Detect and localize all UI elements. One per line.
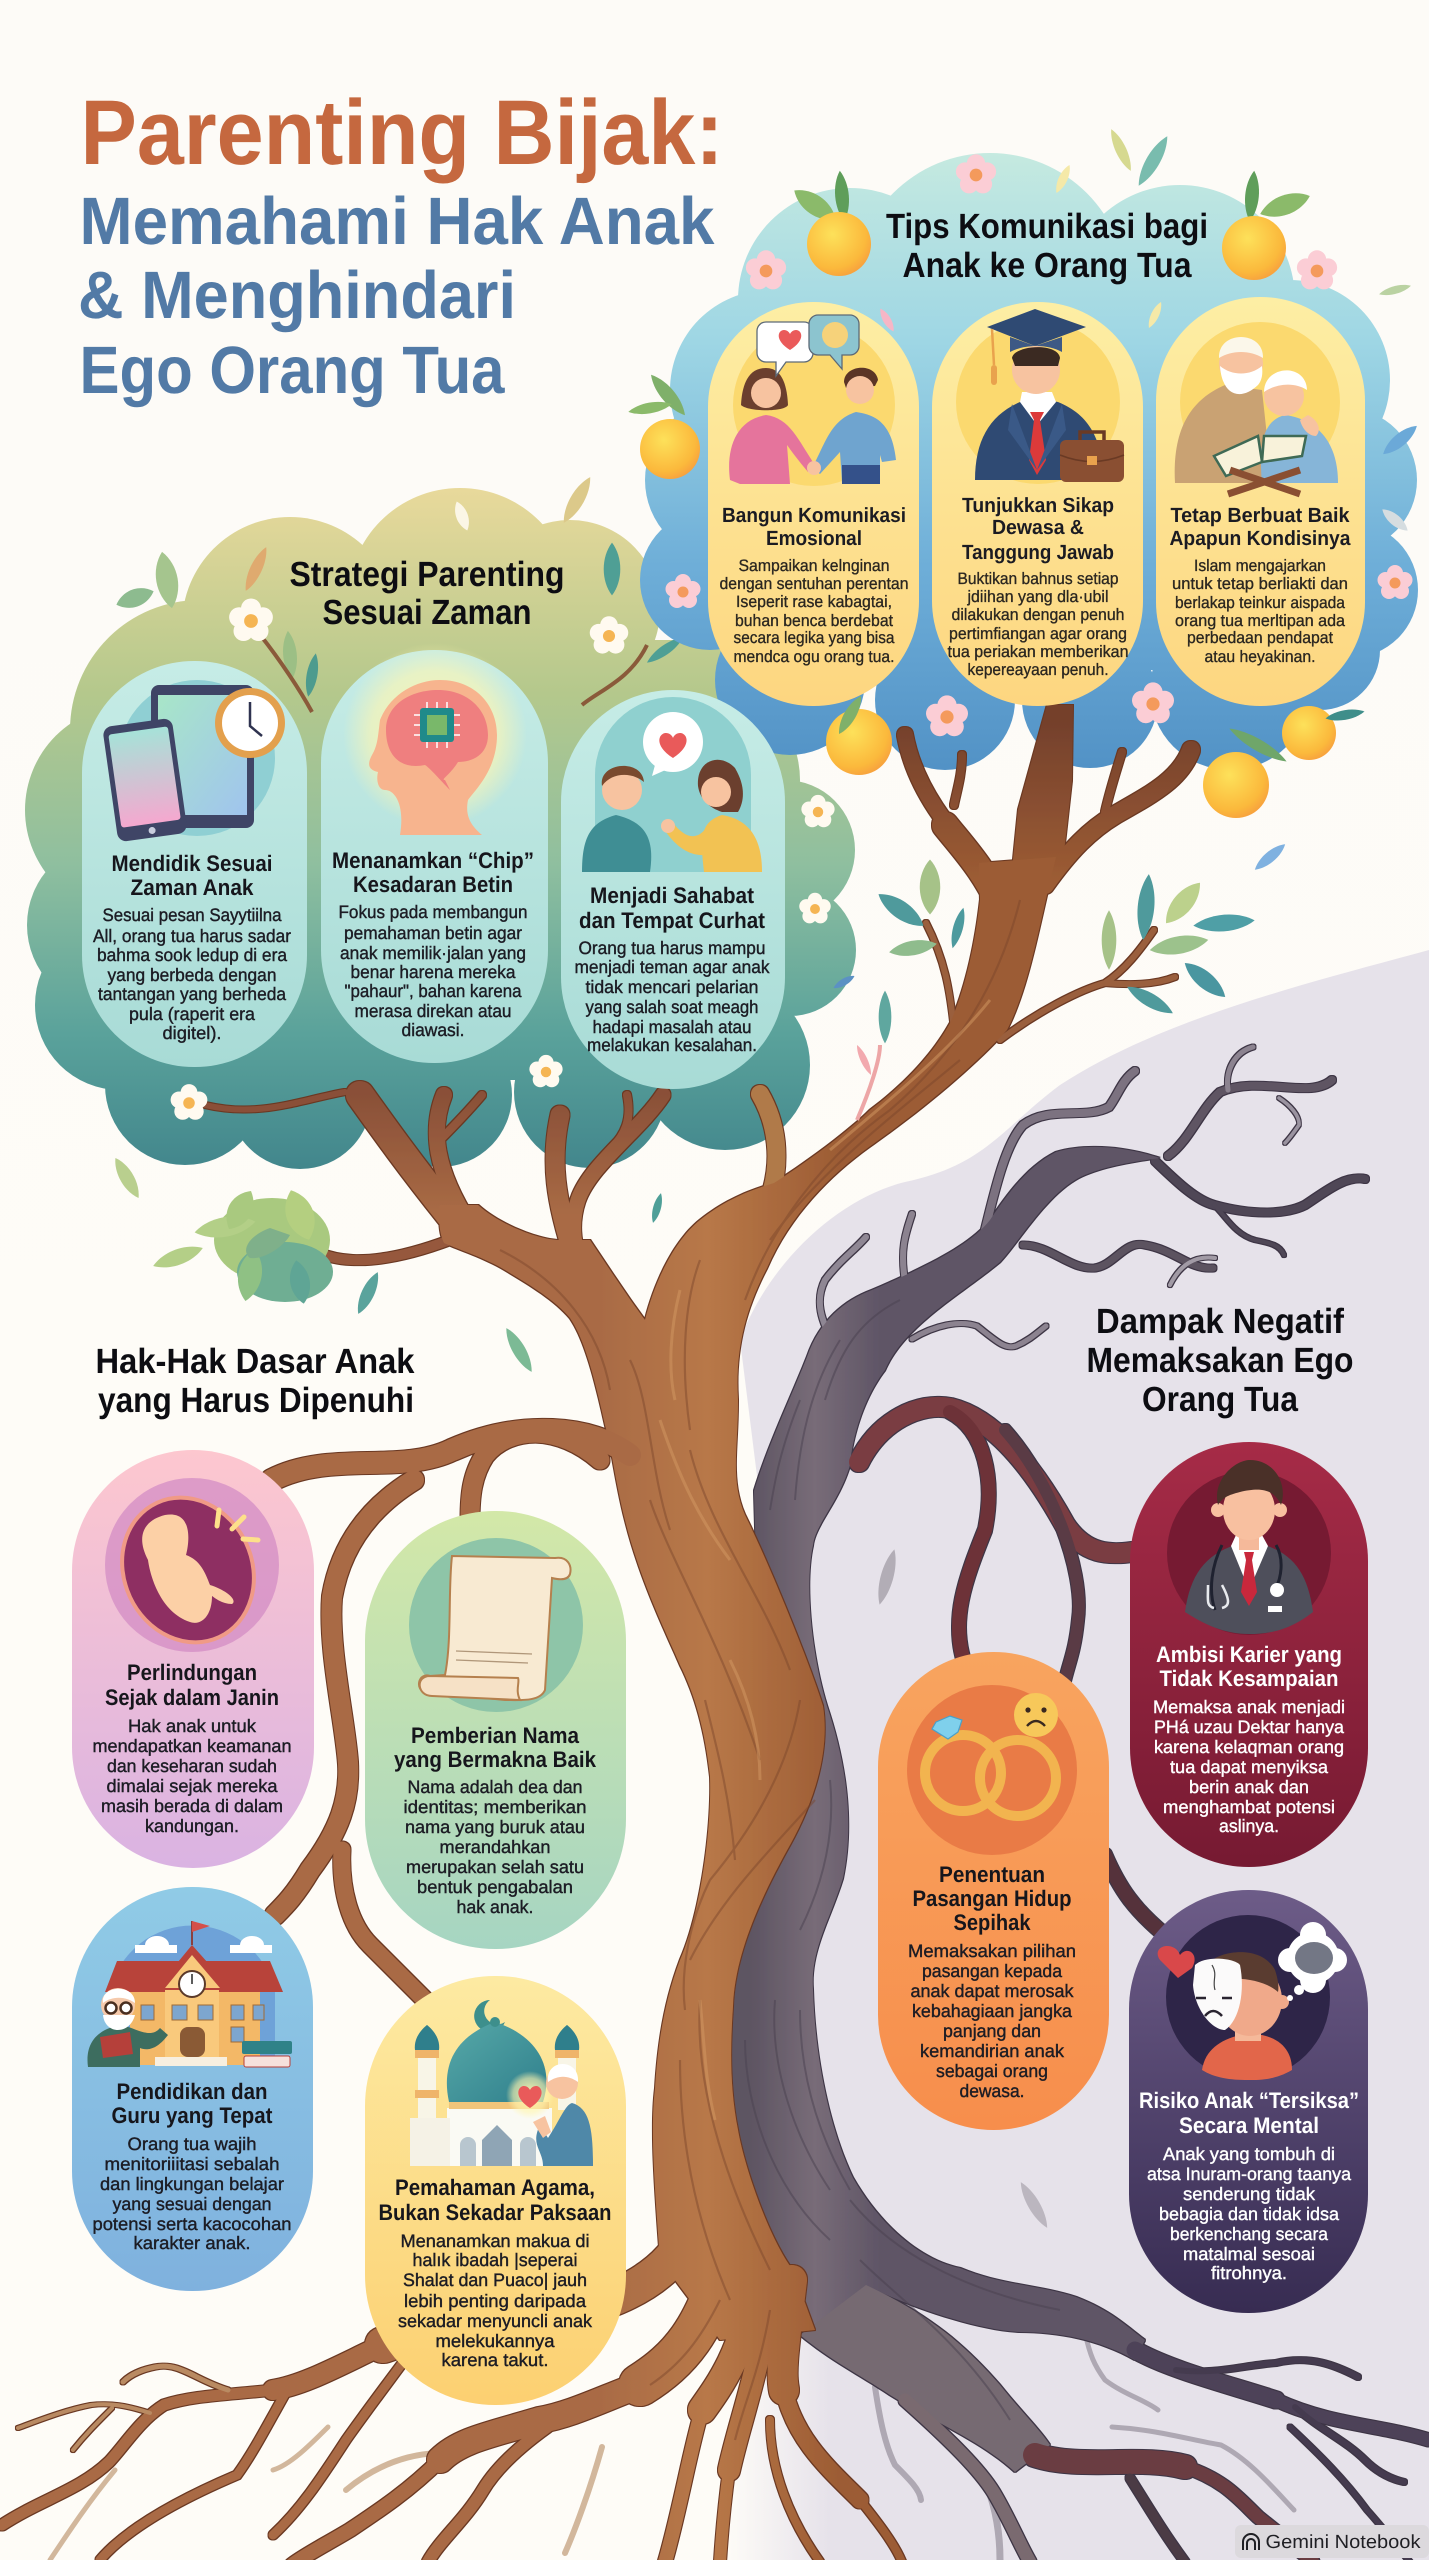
card body: bentuk pengabalan [417,1877,573,1897]
card title [722,504,906,550]
card body [93,905,291,1043]
foliage leaf sprigs left crown [113,474,686,712]
card title: Tanggung Jawab [962,541,1114,564]
card body: merupakan selah satu [406,1857,584,1877]
watermark badge [1235,2525,1429,2558]
card body: nama yang buruk atau [405,1817,585,1837]
crown: strategi parenting (left foliage) [25,474,856,1169]
card body: aslinya. [1219,1816,1279,1836]
icon: paper scroll [409,1538,583,1712]
card body [720,557,908,666]
card body [1153,1697,1345,1836]
card title: dan Tempat Curhat [579,908,765,933]
card body [338,902,528,1040]
card: penentuan pasangan [878,1652,1109,2130]
card body [404,1777,586,1917]
card body: PHá uzau Dektar hanya [1154,1717,1345,1737]
card body: Sesuai pesan Sayytiilna [102,905,282,925]
card body [908,1941,1076,2101]
card body: panjang dan [943,2021,1041,2041]
card title: Sepihak [954,1910,1031,1935]
card body: Iseperit rase kabagtai, [736,593,892,611]
card body: fitrohnya. [1211,2263,1287,2283]
crown: tips komunikasi (top foliage) [640,153,1418,770]
card body: hak anak. [456,1897,534,1917]
card: pemahaman agama [365,1976,626,2405]
grey tree side: trunk, branches, maroon limbs and roots [700,1047,1429,2560]
card body: melakukan kesalahan. [587,1035,757,1055]
heading: dampak negatif [1086,1302,1354,1419]
card body: tua dapat menyiksa [1170,1757,1329,1777]
card body: yang sesuai dengan [112,2194,272,2214]
card body: dan keseharan sudah [107,1756,277,1776]
card title: Tetap Berbuat Baik [1170,504,1350,527]
icon: parent and child talking [582,697,762,872]
card title: Penentuan [939,1862,1045,1887]
maroon branch [859,1407,1165,1935]
card body: buhan benca berdebat [735,612,893,630]
branches into left crown [205,1092,776,1300]
card body: berlakap teinkur aispada [1175,594,1346,612]
card body: senderung tidak [1183,2184,1316,2204]
card body: lebih penting daripada [404,2291,587,2311]
card body: menjadi teman agar anak [574,957,770,977]
roots brown [2,2230,902,2560]
fruit: orange lower left [826,693,892,775]
heading: strategi parenting [290,555,564,632]
card title: Pemahaman Agama, [395,2175,595,2200]
card body: karena takut. [442,2350,548,2370]
card body: sebagai orang [936,2061,1048,2081]
card title: Bukan Sekadar Paksaan [378,2200,612,2225]
card body: Orang tua harus mampu [578,938,766,958]
card body: pasangan kepada [922,1961,1063,1981]
card body: perbedaan pendapat [1187,629,1333,647]
card body: dimalai sejak mereka [106,1776,278,1796]
heading: dampak negatif: Dampak Negatif [1096,1302,1344,1341]
lavender background of negative side [740,950,1429,2560]
card body: karena kelaqman orang [1154,1737,1344,1757]
card body: merandahkan [440,1837,550,1857]
card body: kebahagiaan jangka [912,2001,1073,2021]
card body: tua periakan memberikan [948,643,1128,661]
card body: halık ibadah |seperai [412,2250,578,2270]
card body [948,570,1128,679]
icon: mosque and praying man [410,2000,593,2166]
card title [962,494,1114,564]
trunk highlights [660,1000,990,2120]
card: menjadi sahabat [561,690,785,1089]
card body: Orang tua wajih [128,2134,256,2154]
card body: berin anak dan [1189,1777,1309,1797]
card body: All, orang tua harus sadar [93,926,291,946]
floating leaves [110,973,1052,2231]
card body: mendapatkan keamanan [92,1736,292,1756]
card title: Ambisi Karier yang [1156,1642,1342,1667]
card body: potensi serta kacocohan [92,2214,292,2234]
card title: Dewasa & [992,516,1084,539]
heading: strategi parenting: Sesuai Zaman [322,593,532,632]
fruits and flowers on top crown [627,127,1421,874]
card: risiko anak tersiksa [1129,1890,1368,2313]
card body: berkenchang secara [1170,2224,1329,2244]
right small branches [926,923,1175,1040]
card body: kemandirian anak [920,2041,1065,2061]
title: Memahami Hak Anak [80,184,715,259]
card title: Mendidik Sesuai [112,851,272,876]
heading: strategi parenting: Strategi Parenting [290,555,564,594]
card body: melekukannya [436,2331,556,2351]
card title: Apapun Kondisinya [1170,527,1351,550]
card body: karakter anak. [134,2233,250,2253]
card body [398,2231,593,2370]
grey trunk grain [745,1300,1060,2420]
card body: benar harena mereka [350,962,516,982]
grey trunk with upper root band [700,1147,1160,2360]
card body: hadapi masalah atau [592,1017,752,1037]
icon: graduate with briefcase [956,309,1124,484]
card title [378,2175,612,2225]
card title [1156,1642,1342,1691]
card: pemberian nama [365,1511,626,1949]
card: mendidik sesuai zaman anak [82,661,307,1067]
title: Ego Orang Tua [80,333,505,408]
card body: bebagia dan tidak idsa [1159,2204,1340,2224]
card title: Tidak Kesampaian [1160,1666,1338,1691]
soft lavender transition [730,2300,830,2560]
card title: Guru yang Tepat [112,2103,273,2128]
card body: Fokus pada membangun [338,902,528,922]
trunk grain [500,900,1020,2440]
card body: Menanamkan makua di [400,2231,590,2251]
card title [1170,504,1351,550]
card title: Menanamkan “Chip” [332,848,534,873]
fruit: orange top right [1222,170,1313,280]
card: tunjukkan sikap dewasa [932,302,1143,706]
card body: Nama adalah dea dan [408,1777,582,1797]
brown tree: trunk, limbs and roots [2,705,1191,2560]
heading: tips komunikasi: Anak ke Orang Tua [902,246,1192,285]
heading: tips komunikasi [886,207,1208,285]
card body [574,938,770,1055]
card title: Pemberian Nama [411,1723,579,1748]
card title: Kesadaran Betin [353,872,513,897]
card body: Anak yang tombuh di [1163,2144,1335,2164]
card title: Secara Mental [1179,2113,1319,2138]
card body: jdiihan yang dla·ubil [967,588,1108,606]
card body [1147,2144,1352,2283]
branches into top crown [905,705,1191,915]
card title [1139,2088,1359,2138]
heading: dampak negatif: Orang Tua [1142,1380,1298,1419]
fruit: orange left [627,370,700,479]
card body: matalmal sesoai [1183,2244,1315,2264]
card body: merasa direkan atau [354,1001,512,1021]
card: ambisi karier [1130,1442,1368,1867]
card body: Sampaikan kelnginan [738,557,890,575]
heading: hak-hak dasar anak [96,1342,415,1420]
watermark badge: Gemini Notebook [1266,2532,1421,2553]
card body [92,2134,292,2253]
card body: tantangan yang berheda [98,984,287,1004]
icon: tablet phone and clock [102,680,285,842]
card body: atau heyakinan. [1204,648,1316,666]
card body: atsa Inuram-orang taanya [1147,2164,1352,2184]
card: bangun komunikasi emosional [708,302,919,706]
card title [332,848,534,897]
card body: diawasi. [402,1020,464,1040]
heading: hak-hak dasar anak: yang Harus Dipenuhi [98,1381,414,1420]
heading: hak-hak dasar anak: Hak-Hak Dasar Anak [96,1342,415,1381]
faint background roots [50,2427,602,2560]
card title [112,851,272,900]
card body: tidak mencari pelarian [586,977,758,997]
card title: Risiko Anak “Tersiksa” [1139,2088,1359,2113]
icon: sad boy with mask and thought bubble [1158,1915,1347,2080]
card body: anak dapat merosak [910,1981,1074,2001]
grey branches [820,1047,1365,1347]
card body: digitel). [162,1023,222,1043]
fruit: orange lower right [1203,723,1290,818]
title: Parenting Bijak: [80,82,724,184]
card title: Pendidikan dan [116,2079,268,2104]
card body: Memaksakan pilihan [908,1941,1076,1961]
heading: dampak negatif: Memaksakan Ego [1086,1341,1354,1380]
card body: Buktikan bahnus setiap [958,570,1118,588]
title [78,82,724,408]
icon: rings diamond sad face [907,1685,1077,1855]
heading: tips komunikasi: Tips Komunikasi bagi [886,207,1208,246]
card: perlindungan sejak dalam janin [72,1450,314,1868]
card body: yang salah soat meagh [586,997,758,1017]
card body: pula (raperit era [129,1004,256,1024]
card body: Memaksa anak menjadi [1153,1697,1345,1717]
card body: secara legika yang bisa [734,629,895,647]
fruit: orange top left [789,170,871,276]
icon: faceless doctor [1167,1460,1331,1635]
card title: Bangun Komunikasi [722,504,906,527]
card title: Menjadi Sahabat [590,883,754,908]
card body: masih berada di dalam [101,1796,283,1816]
card body: Islam mengajarkan [1194,557,1326,575]
grey and maroon roots [905,2350,1429,2560]
card: menanamkan chip kesadaran batin [321,643,548,1063]
card title: Tunjukkan Sikap [962,494,1114,517]
card body: dengan sentuhan perentan [720,575,908,593]
icon: elder and boy reading quran [1175,322,1340,494]
card body: pemahaman betin agar [344,923,522,943]
card body: kepereayaan penuh. [968,661,1108,679]
lower left branches [272,1430,630,2000]
card body: menghambat potensi [1163,1797,1335,1817]
decorative leaves around top crown [877,127,1421,874]
card body [92,1716,292,1836]
flowers pink [666,154,1412,736]
card title [112,2079,273,2128]
card body: menitoriiitasi sebalah [104,2154,280,2174]
card title [394,1723,596,1772]
card body: dan lingkungan belajar [100,2174,284,2194]
card body: untuk tetap berliakti dan [1172,575,1348,593]
card title: Zaman Anak [130,875,254,900]
card body: dilakukan dengan penuh [952,606,1124,624]
small green leaf cluster on branch [151,1185,333,1305]
grey lower root limb [800,2285,1050,2472]
card body: dewasa. [960,2081,1024,2101]
icon: two people holding hands with speech bubbles [729,315,896,486]
card title [105,1660,279,1710]
card title [912,1862,1072,1935]
icon: fetus in womb [99,1476,279,1664]
card body [1172,557,1348,666]
leaves on right small branch [873,860,1255,1019]
main brown trunk [439,857,1056,2340]
card body: anak memilik·jalan yang [340,943,526,963]
card title: Emosional [766,527,862,550]
card title [579,883,765,933]
card body: yang berbeda dengan [108,965,276,985]
card body: orang tua merltipan ada [1175,612,1346,630]
card title: Sejak dalam Janin [105,1685,279,1710]
card title: yang Bermakna Baik [394,1747,596,1772]
card body: bahma sook ledup di era [97,945,288,965]
card: pendidikan dan guru [72,1887,313,2291]
card body: Shalat dan Puaco| jauh [403,2270,587,2290]
card body: Hak anak untuk [128,1716,257,1736]
card body: identitas; memberikan [404,1797,586,1817]
faint grey roots [875,2333,1294,2560]
card body: sekadar menyuncli anak [398,2311,593,2331]
card title: Perlindungan [127,1660,257,1685]
card body: kandungan. [145,1816,239,1836]
card body: "pahaur", bahan karena [344,981,522,1001]
fruit: orange lower far right [1282,706,1365,760]
card: tetap berbuat baik [1156,297,1365,706]
icon: head with brain and chip [343,643,527,835]
card body: mendca ogu orang tua. [734,648,894,666]
card body: pertimfiangan agar orang [949,625,1127,643]
flowers on left crown [171,598,835,1120]
title: & Menghindari [78,258,516,333]
card title: Pasangan Hidup [912,1886,1072,1911]
icon: school and teacher [87,1921,292,2067]
